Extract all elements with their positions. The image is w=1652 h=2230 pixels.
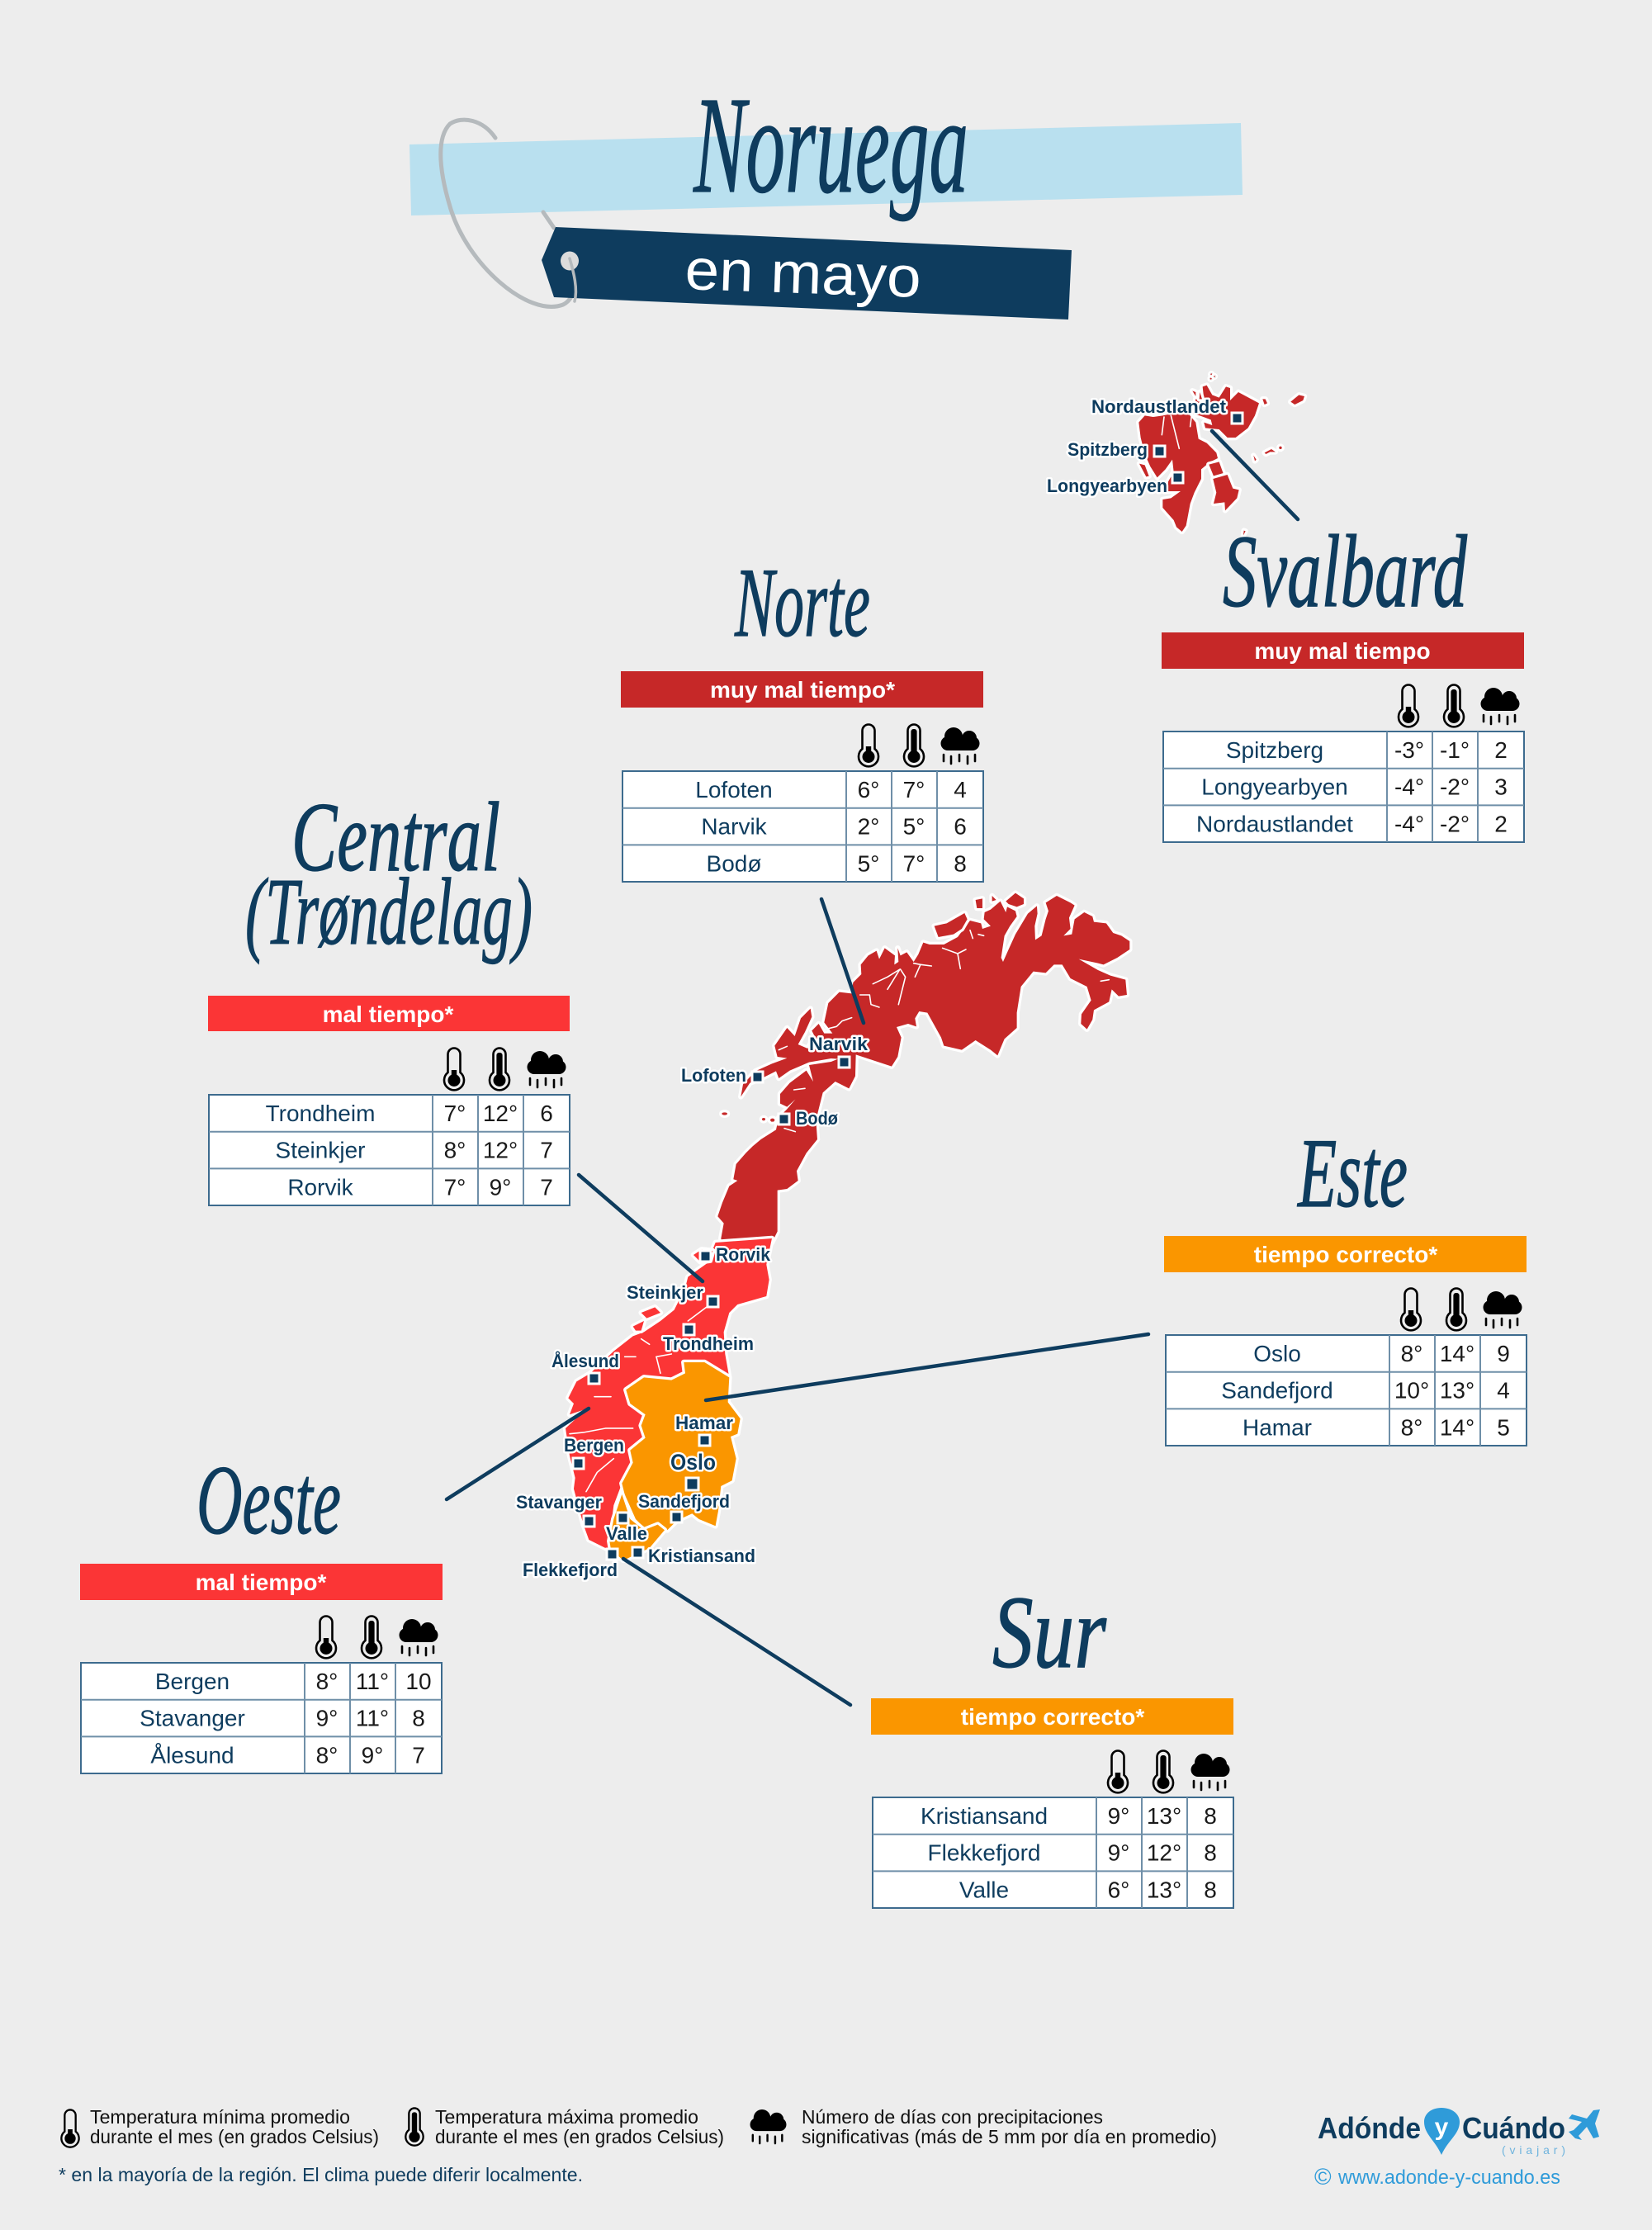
climate table: Central: 7 — [540, 1174, 553, 1200]
heading: Svalbard: Svalbard — [1223, 515, 1467, 629]
heading: Sur: Sur — [992, 1576, 1107, 1690]
climate table: Svalbard: -4° — [1394, 774, 1424, 800]
logo: Adónde y Cuándo — [1314, 2108, 1600, 2190]
city labels: Hamar — [675, 1413, 733, 1433]
Svalbard city markers — [1154, 413, 1243, 483]
tag hole — [561, 251, 579, 271]
climate table: Este — [1166, 1335, 1527, 1446]
icon: location pin — [1424, 2108, 1460, 2155]
climate table: Oeste: 11° — [356, 1706, 389, 1731]
climate table: Central: 7 — [540, 1138, 553, 1163]
climate table: Sur: 12° — [1147, 1840, 1181, 1866]
climate table: Sur: Kristiansand — [921, 1803, 1048, 1829]
climate table: Central: Trondheim — [266, 1101, 375, 1126]
climate table: Este: 13° — [1440, 1378, 1474, 1404]
climate table: Svalbard: Spitzberg — [1226, 737, 1323, 763]
legend item: min temperature — [61, 2106, 379, 2147]
Norte fjords — [779, 930, 1109, 1132]
climate table: Este: 4 — [1497, 1378, 1510, 1404]
climate table: Central: 7° — [444, 1101, 466, 1126]
climate table: Svalbard: 2 — [1494, 811, 1508, 836]
map: Svalbard — [1047, 373, 1304, 535]
icons: min temp, max temp, rain — [444, 1049, 566, 1090]
climate table: Norte: 7° — [903, 777, 925, 803]
weather bar: tiempo correcto — [1164, 1236, 1527, 1272]
icons: min temp, max temp, rain — [859, 725, 979, 766]
logo tagline: (viajar) — [1502, 2143, 1565, 2157]
climate table: Oeste: 9° — [362, 1742, 383, 1768]
Svalbard city labels: Longyearbyen — [1047, 476, 1167, 496]
climate table: Svalbard: -2° — [1440, 774, 1470, 800]
icon: location pin: y — [1435, 2114, 1449, 2141]
city labels: Kristiansand — [648, 1546, 755, 1566]
city labels: Valle — [606, 1523, 647, 1544]
city labels: Oslo — [670, 1450, 716, 1475]
logo wordmark: Adónde — [1318, 2111, 1421, 2145]
climate table: Norte: 7° — [903, 850, 925, 876]
panel: Svalbard — [1162, 515, 1524, 842]
weather bar: mal tiempo: mal tiempo* — [196, 1570, 326, 1595]
logo: Adónde y Cuándo: Cuándo — [1462, 2111, 1565, 2145]
city labels: Rorvik — [716, 1244, 771, 1265]
climate table: Norte: 8 — [954, 850, 967, 876]
climate table: Oeste: Stavanger — [140, 1706, 245, 1731]
city labels: Bodø — [796, 1108, 839, 1129]
website: www.adonde-y-cuando.es — [1337, 2166, 1560, 2189]
climate table: Central: 12° — [483, 1138, 518, 1163]
climate table: Este: 9 — [1497, 1341, 1510, 1366]
climate table: Central — [209, 1095, 570, 1205]
city labels: Sandefjord — [638, 1491, 730, 1512]
city markers — [573, 1057, 850, 1560]
Svalbard land — [1138, 373, 1304, 535]
climate table: Este: 10° — [1394, 1378, 1429, 1404]
climate table: Svalbard — [1163, 731, 1524, 842]
panel: Oeste — [80, 1445, 443, 1773]
weather bar: mal tiempo — [80, 1564, 443, 1600]
weather bar: muy mal tiempo: muy mal tiempo — [1254, 638, 1431, 664]
climate table: Svalbard: -2° — [1440, 811, 1470, 836]
leader line: Central — [579, 1175, 703, 1281]
legend item: precipitation: Número de días con precipitaciones — [802, 2106, 1103, 2128]
city labels: Lofoten — [681, 1065, 746, 1086]
panel: Este — [1164, 1118, 1527, 1446]
subtitle: en mayo: en mayo — [684, 237, 922, 310]
icon: plane — [1569, 2109, 1600, 2140]
heading: Este: Este — [1297, 1118, 1408, 1228]
climate table: Central: 12° — [483, 1101, 518, 1126]
climate table: Central: Steinkjer — [276, 1138, 365, 1163]
Svalbard city labels — [1047, 396, 1227, 496]
climate table: Oeste: 8° — [316, 1669, 338, 1694]
icons: min temp, max temp, rain — [1108, 1750, 1230, 1792]
climate table: Norte — [622, 771, 983, 882]
legend item: precipitation: significativas (más de 5 mm por día en promedio) — [802, 2126, 1217, 2147]
city labels: Bergen — [564, 1435, 624, 1456]
heading: Central (Trøndelag): Central — [291, 782, 500, 892]
string over tag — [570, 258, 575, 301]
leader line: Sur — [623, 1559, 850, 1705]
city labels: Steinkjer — [627, 1282, 703, 1303]
city labels: Ålesund — [551, 1350, 619, 1371]
climate table: Oeste: 8° — [316, 1742, 338, 1768]
climate table: Svalbard: Longyearbyen — [1201, 774, 1348, 800]
climate table: Este: Sandefjord — [1221, 1378, 1333, 1404]
weather bar: tiempo correcto: tiempo correcto* — [1254, 1242, 1437, 1267]
climate table: Norte: 6 — [954, 814, 967, 840]
climate table: Este: 14° — [1440, 1341, 1474, 1366]
Norte region land — [717, 893, 1129, 1245]
footnote: * en la mayoría de la región. El clima puede diferir localmente. — [59, 2164, 583, 2185]
climate table: Central: 9° — [490, 1174, 511, 1200]
heading: Oeste: Oeste — [196, 1445, 341, 1555]
climate table: Sur: 8 — [1204, 1803, 1217, 1829]
weather bar: tiempo correcto: tiempo correcto* — [961, 1704, 1144, 1730]
city labels: Narvik — [809, 1034, 869, 1054]
Central and Oeste region land — [566, 1238, 772, 1550]
climate table: Sur: 8 — [1204, 1877, 1217, 1902]
legend item: precipitation — [750, 2106, 1217, 2147]
city labels: Trondheim — [663, 1333, 754, 1354]
climate table: Oeste: 8 — [412, 1706, 425, 1731]
climate table: Norte: 6° — [858, 777, 879, 803]
climate table: Sur: Valle — [959, 1877, 1009, 1902]
climate table: Norte: 5° — [858, 850, 879, 876]
legend — [59, 2106, 1217, 2185]
climate table: Norte: Narvik — [701, 814, 768, 840]
title band — [409, 123, 1243, 215]
legend item: max temperature: Temperatura máxima promedio — [435, 2106, 698, 2128]
heading: Central (Trøndelag) — [245, 782, 533, 964]
climate table: Sur: 9° — [1108, 1840, 1129, 1866]
climate table: Norte: Lofoten — [695, 777, 773, 803]
city labels: Flekkefjord — [523, 1560, 618, 1580]
weather bar: muy mal tiempo — [1162, 632, 1524, 669]
Sur region land — [609, 1494, 665, 1560]
climate table: Svalbard: Nordaustlandet — [1196, 811, 1353, 836]
climate table: Oeste: 7 — [412, 1742, 425, 1768]
icons: min temp, max temp, rain — [1401, 1288, 1522, 1330]
Svalbard city labels: Spitzberg — [1067, 439, 1148, 460]
climate table: Oeste: 11° — [356, 1669, 389, 1694]
navy tag — [542, 227, 1072, 320]
climate table: Este: Hamar — [1243, 1414, 1312, 1440]
leader line: Norte — [821, 899, 864, 1023]
legend item: min temperature: durante el mes (en grados Celsius) — [90, 2126, 379, 2147]
climate table: Este: 8° — [1401, 1414, 1422, 1440]
climate table: Este: 5 — [1497, 1414, 1510, 1440]
climate table: Svalbard: -3° — [1394, 737, 1424, 763]
title: Noruega: Noruega — [693, 69, 968, 222]
website: © — [1314, 2164, 1332, 2190]
panel: Sur — [871, 1576, 1233, 1908]
weather bar: muy mal tiempo: muy mal tiempo* — [710, 677, 895, 703]
city labels — [516, 1034, 869, 1580]
heading: Central (Trøndelag): (Trøndelag) — [245, 859, 533, 964]
climate table: Central: 8° — [444, 1138, 466, 1163]
leader line: Oeste — [447, 1409, 589, 1499]
climate table: Svalbard: -1° — [1440, 737, 1470, 763]
climate table: Oeste — [81, 1663, 442, 1773]
climate table: Central: 6 — [540, 1101, 553, 1126]
legend item: min temperature: Temperatura mínima promedio — [90, 2106, 350, 2128]
panel: Norte — [621, 547, 983, 882]
climate table: Sur — [873, 1797, 1233, 1908]
Central and Oeste fjords — [570, 1304, 710, 1492]
weather bar: mal tiempo: mal tiempo* — [323, 1001, 453, 1027]
weather bar: tiempo correcto — [871, 1698, 1233, 1735]
climate table: Norte: 4 — [954, 777, 967, 803]
climate table: Svalbard: 2 — [1494, 737, 1508, 763]
climate table: Oeste: Bergen — [155, 1669, 230, 1694]
panel: Central (Trondelag) — [208, 782, 570, 1205]
Svalbard city labels: Nordaustlandet — [1091, 396, 1227, 417]
climate table: Sur: 9° — [1108, 1803, 1129, 1829]
title block — [409, 69, 1243, 320]
climate table: Norte: 2° — [858, 814, 879, 840]
climate table: Central: 7° — [444, 1174, 466, 1200]
leader line: Svalbard — [1212, 431, 1298, 519]
climate table: Sur: 8 — [1204, 1840, 1217, 1866]
climate table: Oeste: 10 — [405, 1669, 432, 1694]
icons: min temp, max temp, rain — [316, 1617, 438, 1658]
Este region land — [622, 1362, 741, 1530]
climate table: Norte: Bodø — [707, 850, 761, 876]
climate table: Svalbard: 3 — [1494, 774, 1508, 800]
climate table: Este: Oslo — [1253, 1341, 1301, 1366]
climate table: Norte: 5° — [903, 814, 925, 840]
climate table: Este: 8° — [1401, 1341, 1422, 1366]
Svalbard fjords — [1162, 415, 1191, 448]
climate table: Sur: 13° — [1147, 1803, 1181, 1829]
climate table: Sur: 13° — [1147, 1877, 1181, 1902]
climate table: Oeste: Ålesund — [150, 1742, 234, 1768]
climate table: Central: Rorvik — [287, 1174, 354, 1200]
climate table: Este: 14° — [1440, 1414, 1474, 1440]
climate table: Sur: 6° — [1108, 1877, 1129, 1902]
weather bar: muy mal tiempo — [621, 671, 983, 708]
tag string — [441, 120, 574, 306]
icons: min temp, max temp, rain — [1399, 685, 1519, 727]
climate table: Sur: Flekkefjord — [928, 1840, 1040, 1866]
heading: Norte: Norte — [734, 547, 870, 657]
legend item: max temperature: durante el mes (en grados Celsius) — [435, 2126, 724, 2147]
city labels: Stavanger — [516, 1492, 602, 1513]
legend item: max temperature — [405, 2106, 724, 2147]
leader line: Este — [706, 1334, 1148, 1400]
climate table: Oeste: 9° — [316, 1706, 338, 1731]
climate table: Svalbard: -4° — [1394, 811, 1424, 836]
weather bar: mal tiempo — [208, 996, 570, 1031]
map: mainland Norway — [516, 893, 1129, 1580]
